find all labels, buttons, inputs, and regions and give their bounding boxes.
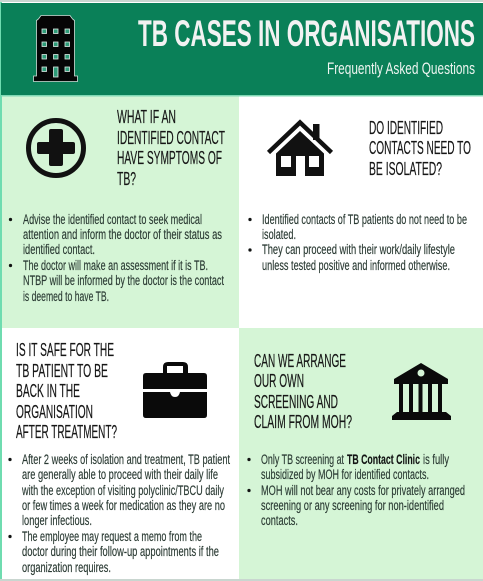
question heading: WHAT IF AN (117, 106, 176, 127)
question heading (117, 106, 225, 189)
question heading (254, 350, 352, 432)
answer bullets: with the exception of visiting polyclinic/TBCU daily (21, 483, 224, 498)
question heading: BACK IN THE (16, 380, 80, 401)
question heading (16, 339, 117, 442)
question heading: TB PATIENT TO BE (16, 360, 108, 381)
answer bullets: doctor during their follow-up appointments if the (22, 544, 219, 559)
answer bullets: or few times a week for medication as they are no (22, 498, 225, 513)
panel: return after treatment (2, 328, 239, 579)
panel: isolation (239, 96, 483, 328)
question heading: IS IT SAFE FOR THE (16, 339, 114, 360)
panel: symptoms of TB (2, 96, 239, 328)
answer bullets: is fully (423, 452, 449, 467)
icon: briefcase (143, 362, 207, 418)
answer bullets: NTBP will be informed by the doctor is the contact (23, 273, 224, 288)
answer bullets: is deemed to have TB. (23, 289, 109, 304)
icon: medical cross (28, 120, 84, 176)
icon: government building (392, 363, 451, 420)
answer bullets: After 2 weeks of isolation and treatment, TB patient (22, 452, 230, 467)
question heading: AFTER TREATMENT? (16, 421, 117, 442)
answer bullets: organization requires. (22, 560, 111, 575)
answer bullets: TB Contact Clinic (347, 452, 420, 467)
question heading (369, 117, 471, 179)
answer bullets: The employee may request a memo from the (22, 529, 202, 544)
question heading: SCREENING AND (254, 391, 338, 412)
panel: screening claims (239, 328, 483, 579)
question heading: CAN WE ARRANGE (254, 350, 346, 371)
icon: house (268, 122, 332, 176)
question heading: CLAIM FROM MOH? (254, 411, 352, 432)
answer bullets (8, 452, 230, 575)
answer bullets: are generally able to proceed with their daily life (22, 467, 218, 482)
answer bullets: identified contact. (23, 242, 95, 257)
answer bullets: Advise the identified contact to seek medical (23, 212, 202, 227)
question heading: OUR OWN (254, 370, 304, 391)
answer bullets (247, 452, 465, 528)
answer bullets: longer infectious. (22, 513, 92, 528)
answer bullets: The doctor will make an assessment if it is TB. (23, 258, 208, 273)
question heading: ORGANISATION (16, 401, 93, 422)
answer bullets: attention and inform the doctor of their status as (23, 227, 222, 242)
icon: office building (34, 16, 78, 82)
answer bullets (9, 212, 224, 304)
answer bullets: Only TB screening at (261, 452, 344, 467)
answer bullets: contacts. (261, 513, 298, 528)
question heading: HAVE SYMPTOMS OF (117, 147, 222, 168)
answer bullets (248, 212, 467, 273)
header banner (1, 3, 483, 96)
question heading: TB? (117, 168, 136, 189)
question heading: IDENTIFIED CONTACT (117, 127, 225, 148)
answer bullets: isolated. (262, 227, 296, 242)
